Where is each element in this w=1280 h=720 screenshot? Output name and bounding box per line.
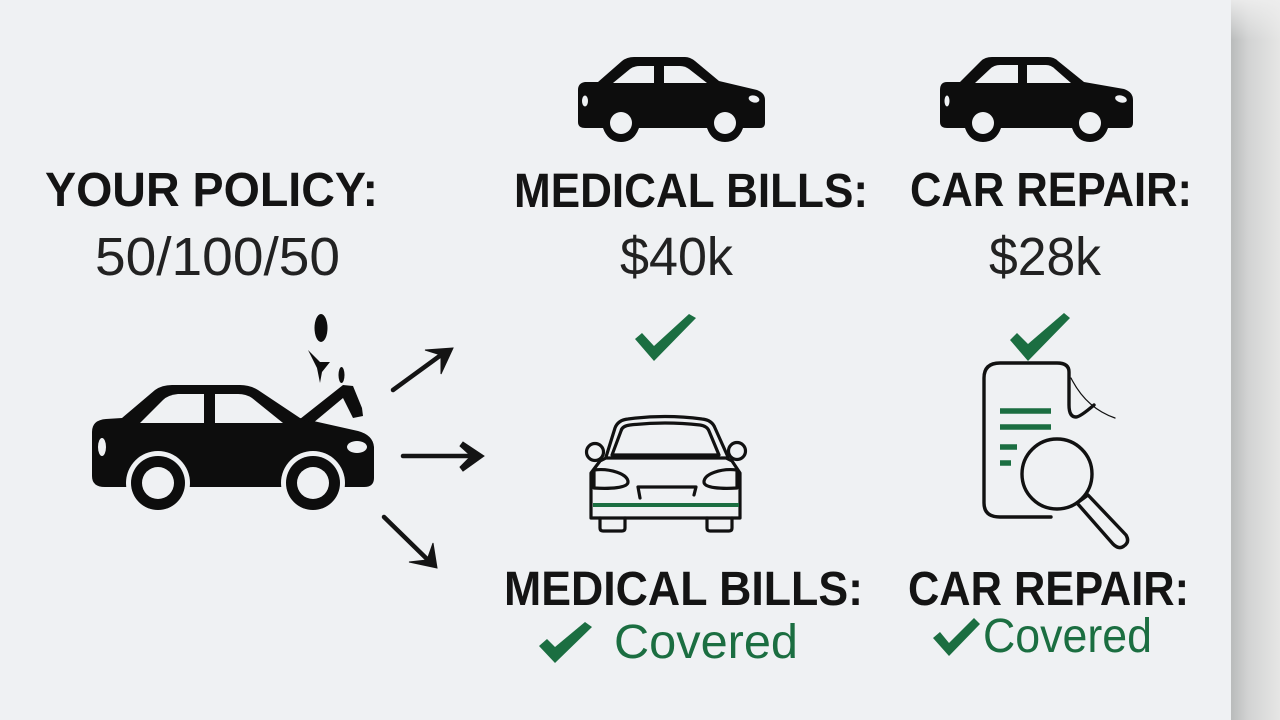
heading: medical bills limit: MEDICAL BILLS: (514, 165, 868, 218)
icon: document with magnifying glass (984, 363, 1128, 548)
arrow: down right (384, 517, 437, 568)
policy limits value: 50/100/50 (95, 227, 340, 287)
text: repair covered: Covered (983, 610, 1152, 663)
page edge shadow (1231, 0, 1280, 720)
arrow: up right (393, 348, 453, 390)
icon: front view car outline (586, 416, 746, 531)
arrow: right (403, 442, 484, 471)
value: car repair amount: $28k (989, 227, 1102, 287)
text: medical covered: Covered (614, 616, 798, 669)
icon: car with raised hood and smoke (92, 314, 374, 515)
icon: small check repair (933, 618, 980, 656)
heading: car repair limit: CAR REPAIR: (910, 164, 1192, 217)
heading: your policy: YOUR POLICY: (45, 164, 378, 217)
value: medical bills amount: $40k (620, 227, 734, 287)
icon: side view car, car repair (940, 57, 1133, 142)
heading: medical bills result: MEDICAL BILLS: (504, 563, 863, 616)
icon: side view car, medical bills (578, 57, 765, 142)
icon: green check medical (635, 314, 696, 361)
heading: car repair result: CAR REPAIR: (908, 563, 1189, 616)
icon: small check medical (539, 622, 592, 663)
icon: green check repair (1010, 313, 1070, 361)
